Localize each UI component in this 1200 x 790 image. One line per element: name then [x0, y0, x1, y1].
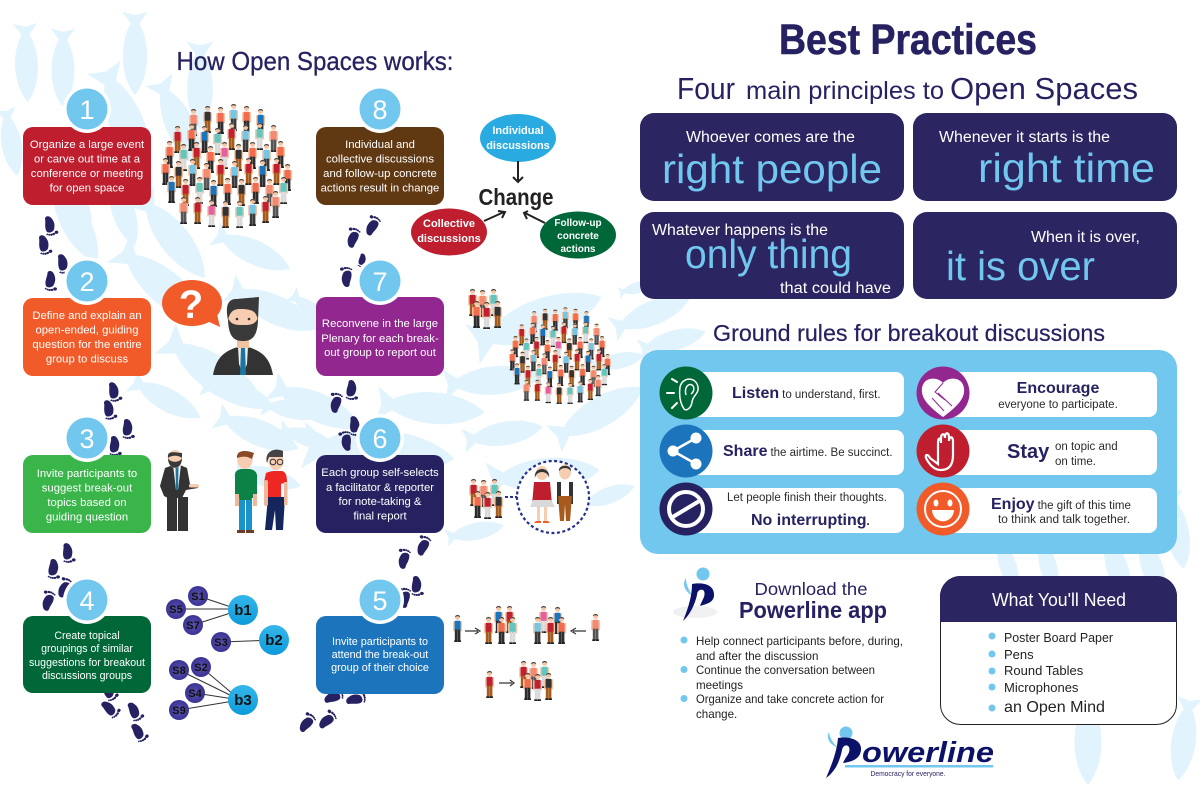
panel: only thing: only thing	[685, 231, 852, 277]
person: bearded presenter	[213, 297, 273, 375]
list: app benefits: and after the discussion	[696, 650, 818, 663]
step 1: or carve out time at a	[34, 154, 141, 166]
chart: suggestion to breakout grouping network: S9	[172, 705, 186, 717]
chart: suggestion to breakout grouping network: S2	[194, 662, 208, 674]
title: Best Practices	[779, 16, 1037, 64]
diagram: change from three inputs: discussions	[417, 233, 481, 245]
step 5: 5	[372, 586, 388, 616]
step 4: groupings of similar	[41, 643, 133, 655]
step 5: attend the break-out	[332, 649, 428, 661]
step 3: suggest break-out	[42, 482, 133, 494]
panel: it is over: When it is over,	[1031, 229, 1140, 246]
step 5: Invite participants to	[332, 636, 428, 648]
step 4	[23, 576, 151, 693]
person: man in green shirt	[235, 451, 257, 533]
heading: How Open Spaces works: How Open Spaces works:	[176, 46, 454, 76]
step 6: for note-taking &	[339, 496, 422, 508]
step 3: Invite participants to	[37, 468, 137, 480]
rule: encourage	[998, 380, 1118, 411]
step 1: 1	[79, 95, 95, 125]
panel: right time	[913, 113, 1177, 201]
step 7: Plenary for each break-	[321, 333, 439, 345]
person: man in red shirt and cap	[264, 450, 288, 530]
plenary crowd	[509, 307, 611, 404]
rule: stay	[1007, 441, 1118, 468]
rule: stay: Stay	[1007, 441, 1050, 463]
chart: suggestion to breakout grouping network: S4	[188, 688, 203, 700]
list: app benefits	[680, 635, 903, 721]
panel: right time: Whenever it starts is the	[939, 129, 1110, 146]
icon: Powerline figure	[673, 568, 717, 621]
list: app benefits: Organize and take concrete action for	[696, 693, 884, 706]
step 1: Organize a large event	[30, 139, 145, 151]
diagram: change from three inputs: actions	[560, 244, 596, 255]
rule: enjoy: Enjoy the gift of this time	[991, 496, 1131, 513]
step 3: guiding question	[46, 512, 128, 524]
heading: download Powerline app	[739, 579, 887, 623]
rule: encourage: everyone to participate.	[998, 399, 1118, 411]
step 3: topics based on	[47, 497, 127, 509]
heading: download Powerline app: Download the	[754, 579, 868, 599]
step 1	[23, 85, 151, 205]
icon: no symbol	[660, 482, 712, 536]
step 8: and follow-up concrete	[323, 168, 437, 180]
list: app benefits: change.	[696, 708, 737, 721]
step 6: final report	[353, 510, 408, 522]
list: app benefits: Continue the conversation between	[696, 664, 875, 677]
panel: only thing: that could have	[780, 280, 891, 297]
chart: suggestion to breakout grouping network: S1	[191, 591, 205, 603]
step 3	[23, 414, 151, 533]
step 8: actions result in change	[321, 182, 439, 194]
panel: what you'll need: Poster Board Paper	[1004, 630, 1114, 645]
step 2: group to discuss	[46, 354, 128, 366]
panel: right people	[640, 113, 904, 201]
logo: Powerline: Democracy for everyone.	[870, 769, 946, 778]
subtitle: four main principles	[677, 71, 1138, 106]
logo: Powerline	[826, 726, 994, 778]
chart: suggestion to breakout grouping network	[166, 586, 289, 720]
subtitle: four main principles: main principles to	[746, 77, 944, 105]
step 2: open-ended, guiding	[35, 324, 139, 336]
step 2	[23, 257, 151, 376]
group with facilitator and reporter callout	[469, 461, 589, 533]
step 6: Each group self-selects	[321, 467, 439, 479]
icon: hand	[916, 424, 970, 478]
rule: no interrupting: Let people finish their thoughts.	[727, 492, 887, 504]
step 4: suggestions for breakout	[29, 657, 145, 669]
step 3: 3	[79, 424, 95, 454]
rule: listen: Listen to understand, first.	[732, 385, 881, 402]
step 8: collective discussions	[326, 154, 434, 166]
panel: only thing: Whatever happens is the	[652, 222, 828, 239]
icon: share	[660, 424, 712, 478]
panel: what you'll need: Pens	[1004, 647, 1034, 662]
panel: what you'll need: Round Tables	[1004, 663, 1084, 678]
rule: no interrupting	[727, 492, 887, 529]
step 2: Define and explain an	[32, 310, 142, 322]
diagram: change from three inputs: Follow-up	[554, 218, 602, 229]
heading: ground rules: Ground rules for breakout discussions	[713, 320, 1105, 346]
step 1: conference or meeting	[31, 168, 143, 180]
panel: it is over: it is over	[946, 243, 1095, 289]
list: app benefits: Help connect participants before, during,	[696, 635, 903, 648]
panel: right time: right time	[978, 145, 1155, 191]
diagram: change from three inputs: Change	[478, 184, 554, 210]
diagram: change from three inputs: Individual	[492, 125, 544, 137]
step 7: Reconvene in the large	[322, 318, 438, 330]
step 2: question for the entire	[32, 339, 142, 351]
step 6	[316, 414, 444, 533]
footprints between steps	[35, 214, 432, 744]
panel: what you'll need: What You'll Need	[992, 590, 1126, 610]
step 8	[316, 85, 444, 205]
diagram: change from three inputs: concrete	[557, 231, 599, 242]
chart: suggestion to breakout grouping network: S5	[169, 604, 183, 616]
rule: enjoy	[991, 496, 1131, 526]
panel: what you'll need: Microphones	[1004, 680, 1079, 695]
panel: right people: right people	[662, 146, 882, 192]
chart: suggestion to breakout grouping network: S8	[172, 665, 186, 677]
chart: suggestion to breakout grouping network: b2	[265, 632, 283, 649]
logo: Powerline: owerline	[862, 737, 994, 769]
person: presenter gesturing	[160, 450, 199, 531]
step 7	[316, 257, 444, 376]
diagram: change from three inputs: discussions	[486, 140, 550, 152]
crowd illustration	[161, 104, 292, 228]
step 7: out group to report out	[324, 347, 437, 359]
panel: only thing	[640, 212, 904, 299]
step 6: 6	[372, 424, 388, 454]
heading: download Powerline app: Powerline app	[739, 597, 887, 623]
list: app benefits: meetings	[696, 679, 743, 692]
icon: smile	[916, 482, 970, 536]
diagram: change from three inputs: Collective	[423, 218, 475, 230]
subtitle: four main principles: Four	[677, 71, 735, 106]
step 7: 7	[372, 267, 388, 297]
step 5	[316, 576, 444, 694]
icon: heart handshake	[916, 366, 970, 420]
step 5: group of their choice	[331, 662, 429, 674]
panel: it is over	[913, 212, 1177, 299]
rule: enjoy: to think and talk together.	[998, 514, 1130, 526]
diagram: change from three inputs	[411, 114, 616, 258]
step 8: Individual and	[345, 139, 415, 151]
icon: speech bubble with question mark: ?	[179, 283, 203, 327]
chart: suggestion to breakout grouping network: b3	[234, 692, 252, 709]
step 1: for open space	[50, 182, 124, 194]
step 2: 2	[79, 267, 95, 297]
step 8: 8	[372, 95, 388, 125]
panel: what you'll need: an Open Mind	[1004, 699, 1105, 716]
rule: stay: on topic and	[1055, 441, 1118, 453]
step 4: 4	[79, 586, 95, 616]
panel: ground rules	[640, 350, 1177, 554]
chart: suggestion to breakout grouping network: S3	[214, 637, 228, 649]
chart: suggestion to breakout grouping network: S7	[186, 620, 200, 632]
panel: right people: Whoever comes are the	[686, 129, 855, 146]
rule: no interrupting: No interrupting.	[751, 512, 870, 529]
illustration: participants joining break-out groups	[453, 606, 600, 701]
chart: suggestion to breakout grouping network: b1	[234, 602, 252, 619]
rule: encourage: Encourage	[1017, 380, 1099, 397]
rule: stay: on time.	[1055, 456, 1096, 468]
group of participants	[468, 289, 502, 329]
panel: what you'll need	[940, 576, 1177, 724]
rule: share: Share the airtime. Be succinct.	[723, 443, 893, 460]
step 6: a facilitator & reporter	[326, 482, 434, 494]
step 4: Create topical	[54, 630, 120, 642]
step 4: discussions groups	[42, 670, 132, 682]
icon: ear	[660, 366, 712, 420]
icon: speech bubble with question mark	[162, 280, 222, 327]
subtitle: four main principles: Open Spaces	[950, 71, 1138, 106]
